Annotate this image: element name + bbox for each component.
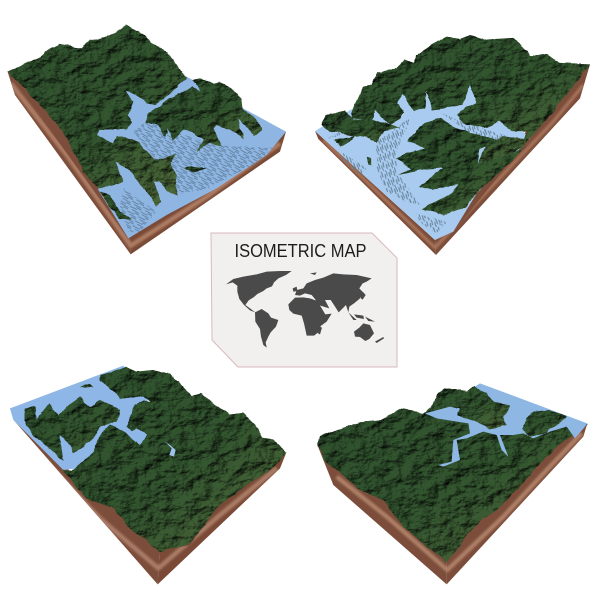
terrain: left ridge	[322, 111, 400, 147]
soil light band	[52, 464, 278, 572]
terrain: right peninsula	[147, 78, 262, 152]
terrain: island	[367, 157, 372, 167]
terrain: main mountains	[350, 35, 590, 163]
terrain: left ridge	[25, 397, 120, 462]
water ripples	[327, 112, 520, 233]
map block: top right	[315, 35, 590, 255]
map block: bottom right	[317, 383, 587, 584]
map block: bottom left	[10, 366, 286, 584]
eurasia	[295, 273, 372, 312]
right soil side	[158, 453, 286, 584]
water surface	[90, 77, 286, 238]
soil light band	[11, 83, 280, 246]
terrain: peninsula	[432, 387, 510, 428]
lake	[165, 442, 176, 457]
right soil side	[447, 423, 587, 584]
soil light band	[337, 433, 582, 570]
water surface	[315, 83, 530, 240]
soil light band	[323, 85, 583, 248]
south america	[255, 309, 278, 348]
left soil side	[315, 131, 436, 255]
terrain: main mountains	[7, 25, 188, 207]
right soil side	[128, 132, 286, 254]
terrain: main mountains	[63, 367, 286, 552]
right soil side	[435, 64, 590, 255]
left soil side	[10, 408, 160, 584]
left soil side	[7, 71, 131, 254]
map block: top left	[7, 25, 286, 254]
north america	[226, 271, 292, 312]
card title: ISOMETRIC MAP	[234, 241, 366, 261]
terrain: islet	[80, 383, 93, 388]
terrain: main landscape	[317, 387, 587, 562]
terrain: islands	[100, 167, 207, 220]
islands	[293, 272, 384, 343]
water surface	[10, 366, 173, 470]
water ripples	[120, 122, 273, 232]
australia	[354, 323, 374, 341]
terrain: central ridge	[397, 118, 527, 215]
map card	[211, 233, 397, 367]
water: inlets	[425, 383, 587, 467]
africa	[288, 297, 332, 336]
left soil side	[317, 445, 447, 584]
terrain: island	[522, 410, 567, 437]
card background	[211, 233, 397, 367]
world map	[226, 271, 384, 348]
